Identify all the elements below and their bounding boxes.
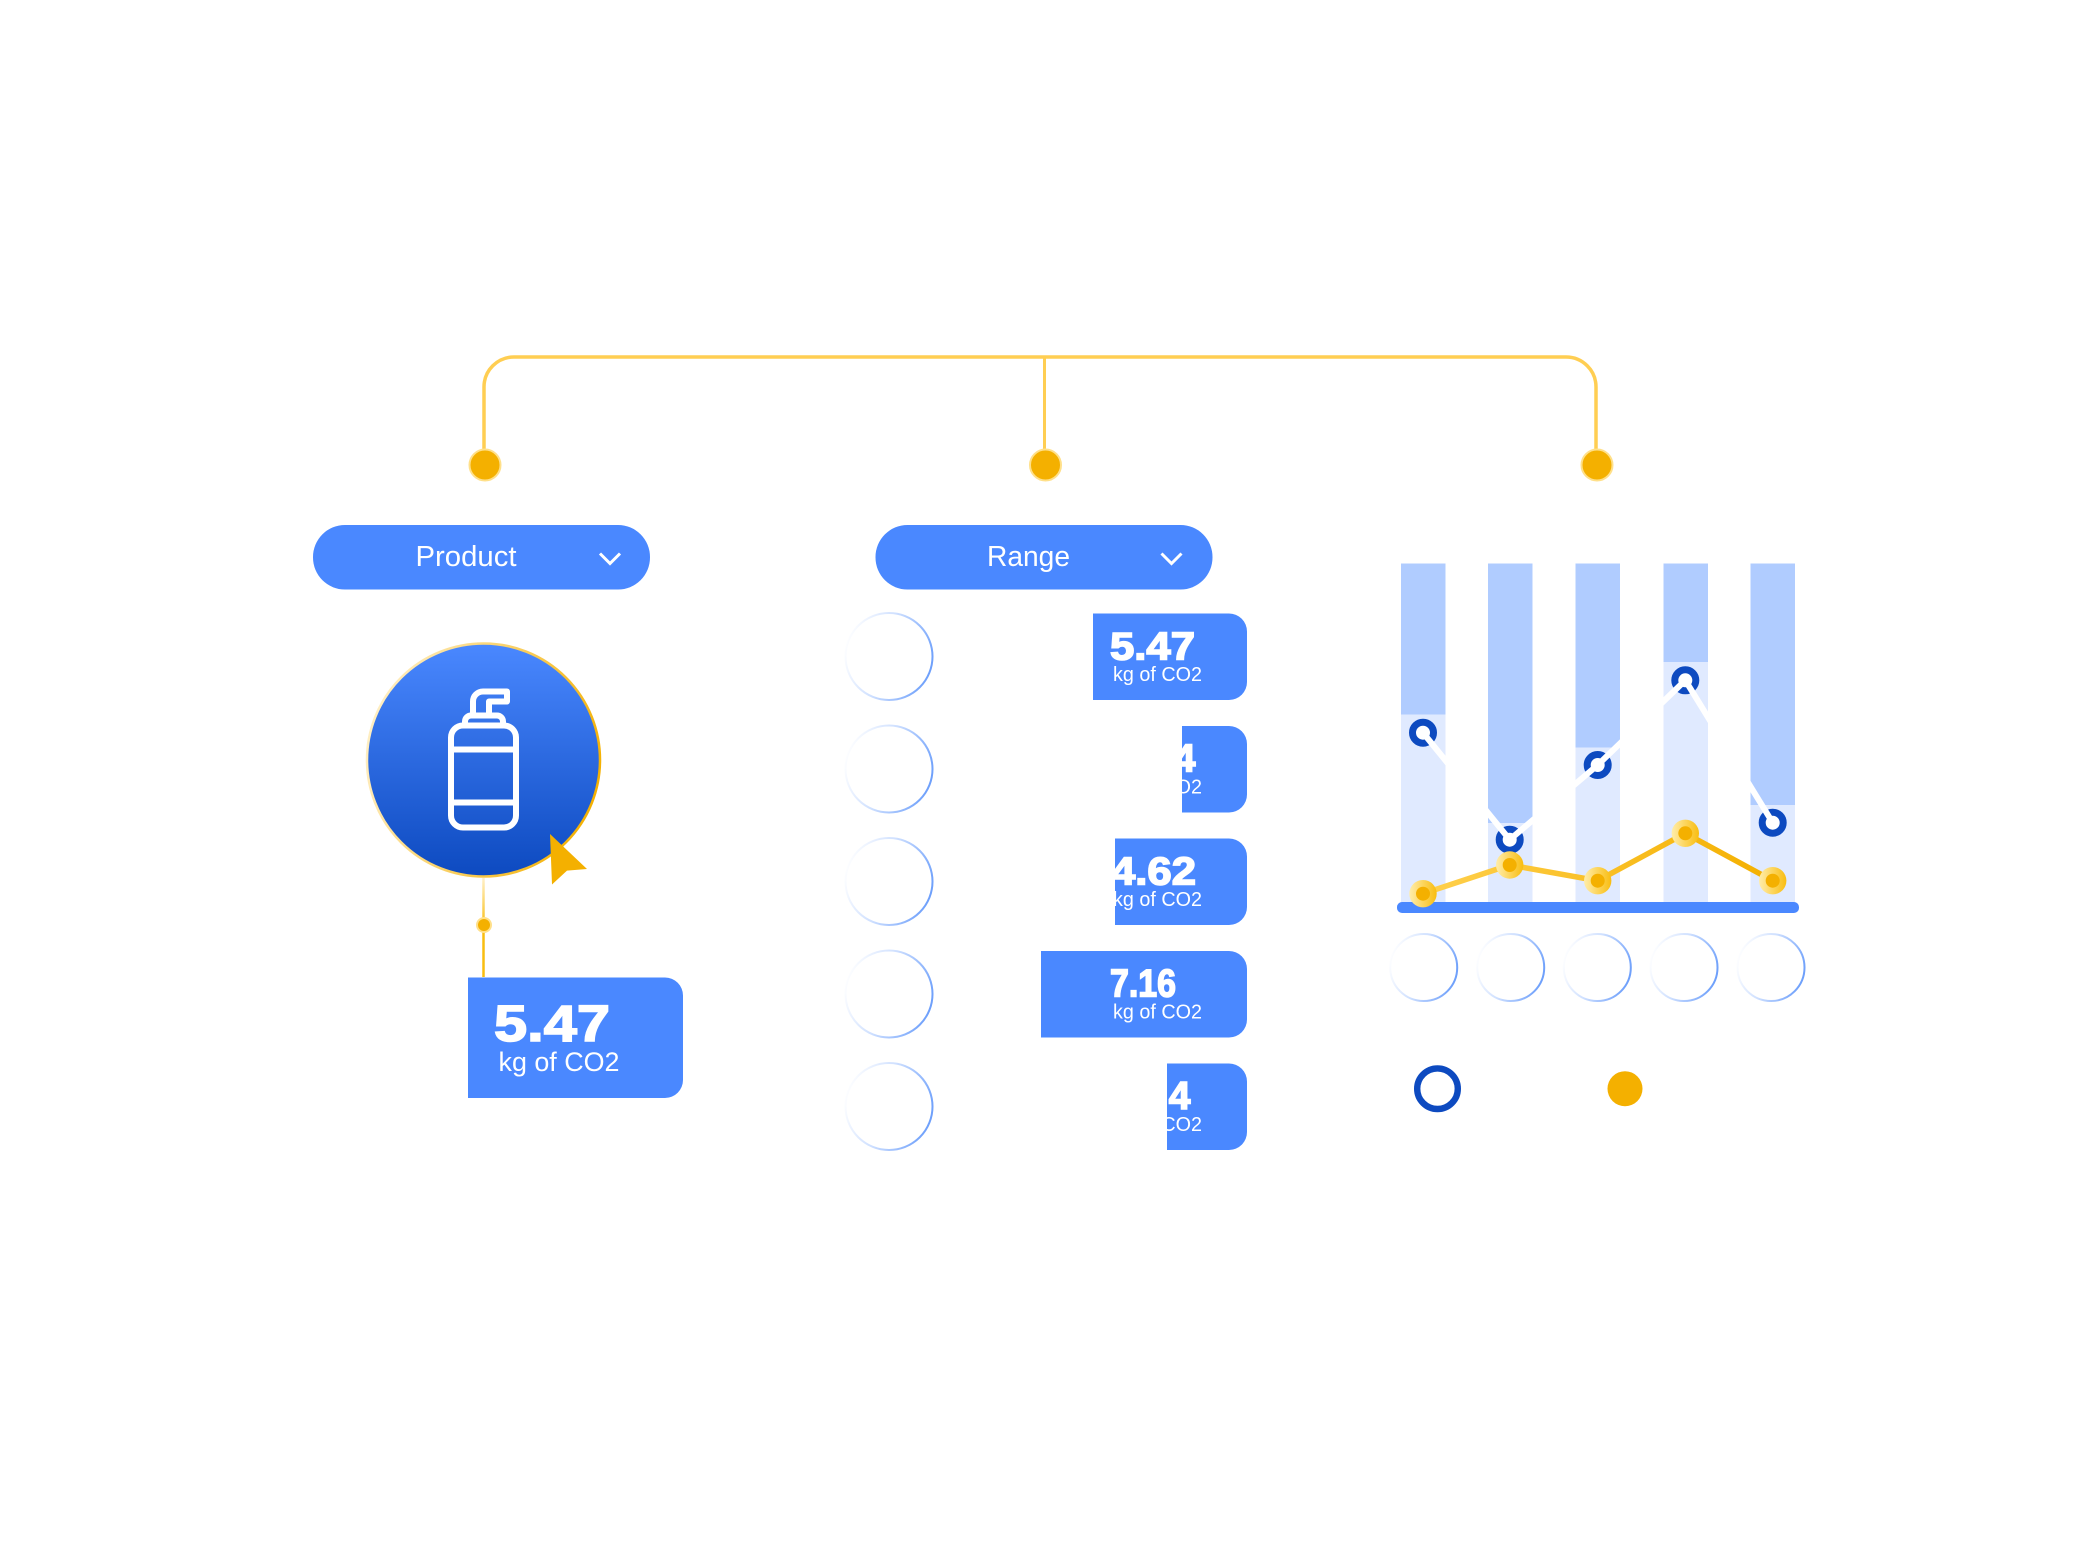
range dropdown: [876, 525, 1212, 590]
range row 2: kg of CO2: [1113, 776, 1202, 798]
range row 5: 4: [1169, 1075, 1191, 1118]
yellow series line: [1423, 833, 1773, 894]
panel: chart: [1390, 564, 1804, 1109]
range dropdown: Range: [987, 541, 1070, 573]
panel: range: [846, 525, 1247, 1150]
stem from disc to value: [482, 878, 485, 977]
stem dot: [477, 918, 491, 932]
yellow series markers: [1409, 820, 1786, 907]
chart baseline: [1397, 902, 1799, 913]
legend: blue ring: [1417, 1068, 1458, 1109]
range row 4: kg of CO2: [1113, 1002, 1202, 1024]
connector dot: product: [470, 450, 500, 480]
bar chart: [1401, 564, 1795, 902]
connector dot: chart: [1582, 450, 1612, 480]
white series line: [1423, 680, 1773, 840]
legend: yellow dot: [1608, 1071, 1642, 1106]
range row 3: [846, 838, 1247, 925]
product dropdown: Product: [416, 541, 516, 573]
icon: cursor arrow: [550, 834, 587, 884]
icon: pump bottle: [451, 692, 516, 828]
range row 4: 7.16: [1110, 962, 1176, 1006]
chart axis circles: [1390, 934, 1804, 1001]
range row 1: kg of CO2: [1113, 664, 1202, 686]
product value box: kg of CO2: [498, 1047, 620, 1077]
range row 3: 4.62: [1111, 850, 1196, 894]
range row 2: [846, 726, 1247, 812]
range row 4: [846, 950, 1247, 1038]
product value box: 5.47: [494, 995, 610, 1052]
range row 3: kg of CO2: [1113, 889, 1202, 911]
range row 1: 5.47: [1110, 626, 1195, 668]
range row 5: kg of CO2: [1113, 1114, 1202, 1136]
product value box: [468, 978, 683, 1098]
range row 5: [846, 1063, 1247, 1150]
range row 2: 4: [1174, 738, 1196, 780]
product dropdown: [313, 525, 650, 590]
range row 1: [846, 613, 1247, 700]
connector dot: range: [1030, 450, 1061, 480]
product disc: [367, 644, 600, 876]
blue series markers: [1412, 670, 1783, 850]
panel: product: [313, 525, 683, 1098]
connector tree: [470, 357, 1612, 480]
